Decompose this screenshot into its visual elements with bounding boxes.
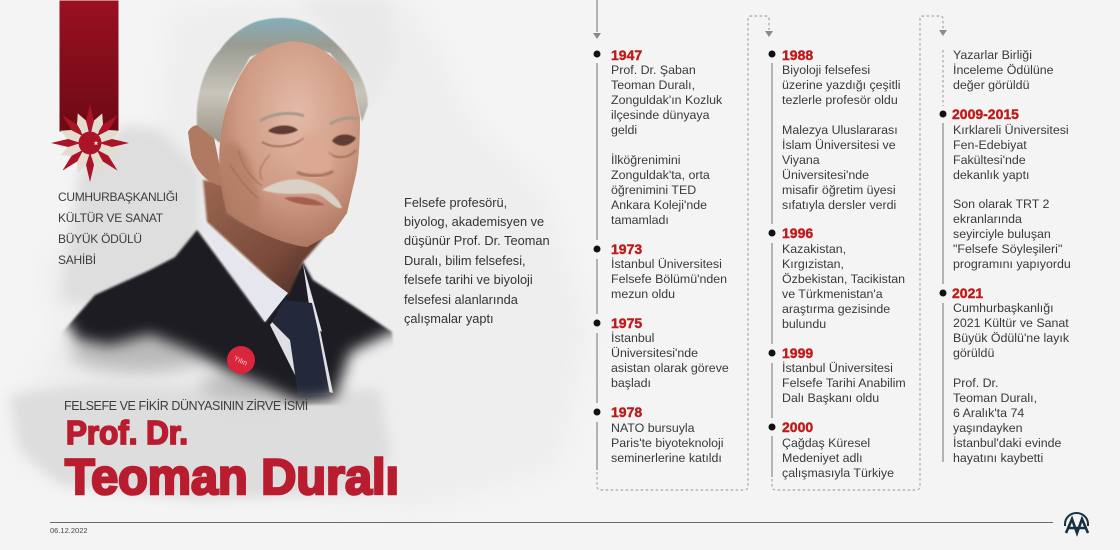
nostril shadow [297,171,333,176]
timeline column 2: Medeniyet adlı [782,451,863,465]
timeline column 2: 1996 [782,225,813,241]
timeline column 1: Zonguldak'ta, orta [611,168,710,182]
timeline column 1: 1973 [611,241,642,257]
timeline column 1: İstanbul Üniversitesi [611,257,722,271]
timeline column 2: 1988 [782,47,813,63]
award caption: BÜYÜK ÖDÜLÜ [58,232,143,246]
timeline column 3: yaşındayken [953,421,1023,435]
timeline column 1: Zonguldak'ın Kozluk [611,93,723,107]
timeline column 2: Kırgızistan, [782,257,844,271]
timeline column 3: Son olarak TRT 2 [953,197,1050,211]
timeline column 3: değer görüldü [953,78,1030,92]
timeline column 2: Kazakistan, [782,242,846,256]
eyes [268,126,356,146]
lapel pin: Yılın [233,355,248,368]
cream petals [59,112,121,174]
timeline column 1: NATO bursuyla [611,421,695,435]
timeline column 2: tezlerle profesör oldu [782,93,898,107]
watercolor wash behind portrait [8,0,590,510]
timeline column 2: Viyana [782,153,820,167]
timeline column 1: 1947 [611,47,642,63]
intro paragraph: Felsefe profesörü, [404,195,507,210]
intro paragraph: biyolog, akademisyen ve [404,214,544,229]
ear [188,125,224,186]
timeline column 2: 1999 [782,345,813,361]
timeline column 2: üzerine yazdığı çeşitli [782,78,900,92]
timeline column 3: programını yapıyordu [953,257,1071,271]
eye bags [262,138,356,157]
hair [197,18,368,143]
timeline column 1: mezun oldu [611,287,675,301]
medal emblem [51,104,129,182]
award caption: SAHİBİ [58,253,97,267]
moustache [262,179,342,208]
timeline column 2: araştırma gezisinde [782,302,890,316]
timeline column 3: seyirciyle buluşan [953,227,1051,241]
award caption [58,189,179,267]
crescent and star [86,136,92,150]
timeline column 3: 2021 [952,285,983,301]
timeline column 3: Teoman Duralı, [953,391,1037,405]
timeline column 2: misafir öğretim üyesi [782,183,896,197]
timeline column 1: 1975 [611,315,642,331]
timeline column 3: Fakültesi'nde [953,153,1026,167]
timeline column 1: başladı [611,376,651,390]
timeline column 1: Prof. Dr. Şaban [611,63,696,77]
timeline column 2: İslam Üniversitesi ve [782,138,896,152]
timeline column 2: Malezya Uluslararası [782,123,898,137]
timeline column 3: Prof. Dr. [953,376,998,390]
timeline column 1: öğrenimini TED [611,183,696,197]
footer rule [50,522,1053,523]
timeline column 3: İnceleme Ödülüne [953,63,1054,77]
timeline column 3: "Felsefe Söyleşileri" [953,242,1062,256]
timeline column 2: Çağdaş Küresel [782,436,870,450]
timeline column 3: Büyük Ödülü'ne layık [953,331,1070,345]
intro paragraph: felsefe tarihi ve biyoloji [404,272,533,287]
timeline column 2: Felsefe Tarihi Anabilim [782,376,906,390]
intro paragraph: felsefesi alanlarında [404,292,519,307]
timeline column 2: bulundu [782,317,826,331]
AA logo [1065,513,1088,533]
subtitle: FELSEFE VE FİKİR DÜNYASININ ZİRVE İSMİ [64,399,309,413]
timeline column 3 [952,48,1071,465]
lapel pin [227,346,255,374]
name heading [65,414,399,505]
timeline column 1: Paris'te biyoteknoloji [611,436,724,450]
timeline column 3: 6 Aralık'ta 74 [953,406,1024,420]
timeline column 3: dekanlık yaptı [953,168,1029,182]
clothing and neck, faded at the bottom [60,180,400,405]
suit jacket [60,230,400,405]
necktie [272,300,330,395]
timeline column 2: 2000 [782,419,813,435]
eyebrows [260,113,358,124]
timeline column 3: hayatını kaybetti [953,451,1043,465]
timeline column 2: sıfatıyla dersler verdi [782,198,896,212]
timeline column 2: Dalı Başkanı oldu [782,391,879,405]
neck [203,180,335,296]
timeline column 2: İstanbul Üniversitesi [782,361,893,375]
timeline column 1: Ankara Koleji'nde [611,198,707,212]
award caption: KÜLTÜR VE SANAT [58,211,164,225]
timeline connectors [593,0,947,490]
intro paragraph: düşünür Prof. Dr. Teoman [404,233,550,248]
timeline column 3: Cumhurbaşkanlığı [953,301,1054,315]
timeline column 2: Üniversitesi'nde [782,168,869,182]
timeline column 3: Kırklareli Üniversitesi [953,123,1069,137]
shirt collar [200,221,322,332]
timeline column 3: 2021 Kültür ve Sanat [953,316,1069,330]
intro paragraph [404,195,550,326]
timeline column 1: Teoman Duralı, [611,78,695,92]
timeline column 1: seminerlerine katıldı [611,451,722,465]
red points [51,104,129,182]
timeline column 3: 2009-2015 [952,106,1019,122]
date: 06.12.2022 [50,526,88,535]
shirt front [270,322,333,393]
timeline column 1: İlköğrenimini [611,153,681,167]
portrait of Prof. Dr. Teoman Duralı [60,18,400,405]
timeline column 3: ekranlarında [953,212,1022,226]
facial wrinkles [230,150,270,198]
timeline column 2: çalışmasıyla Türkiye [782,466,894,480]
timeline column 3: Yazarlar Birliği [953,48,1032,62]
timeline column 1: asistan olarak göreve [611,361,729,375]
red ribbon [59,0,119,132]
timeline column 1: İstanbul [611,331,654,345]
timeline column 3: görüldü [953,346,994,360]
name heading: Teoman Duralı [65,449,399,505]
face [219,42,360,247]
timeline column 1: Üniversitesi'nde [611,346,698,360]
timeline column 2: Biyoloji felsefesi [782,63,870,77]
timeline column 2: ve Türkmenistan'a [782,287,883,301]
timeline column 3: İstanbul'daki evinde [953,436,1062,450]
name heading: Prof. Dr. [66,414,188,451]
award caption: CUMHURBAŞKANLIĞI [58,189,179,204]
lips [284,197,325,205]
timeline column 1: tamamladı [611,213,669,227]
timeline column 1: ilçesinde dünyaya [611,108,710,122]
timeline column 2 [782,47,906,480]
timeline column 1: geldi [611,123,637,137]
timeline column 1: Felsefe Bölümü'nden [611,272,727,286]
timeline column 1 [611,47,729,465]
nose [295,135,333,176]
intro paragraph: Duralı, bilim felsefesi, [404,253,526,268]
timeline column 3: Fen-Edebiyat [953,138,1027,152]
smoke haze under the shoulders [70,332,310,399]
intro paragraph: çalışmalar yaptı [404,311,494,326]
left cheek shading [222,142,260,226]
timeline column 1: 1978 [611,404,642,420]
timeline column 2: Özbekistan, Tacikistan [782,272,905,286]
